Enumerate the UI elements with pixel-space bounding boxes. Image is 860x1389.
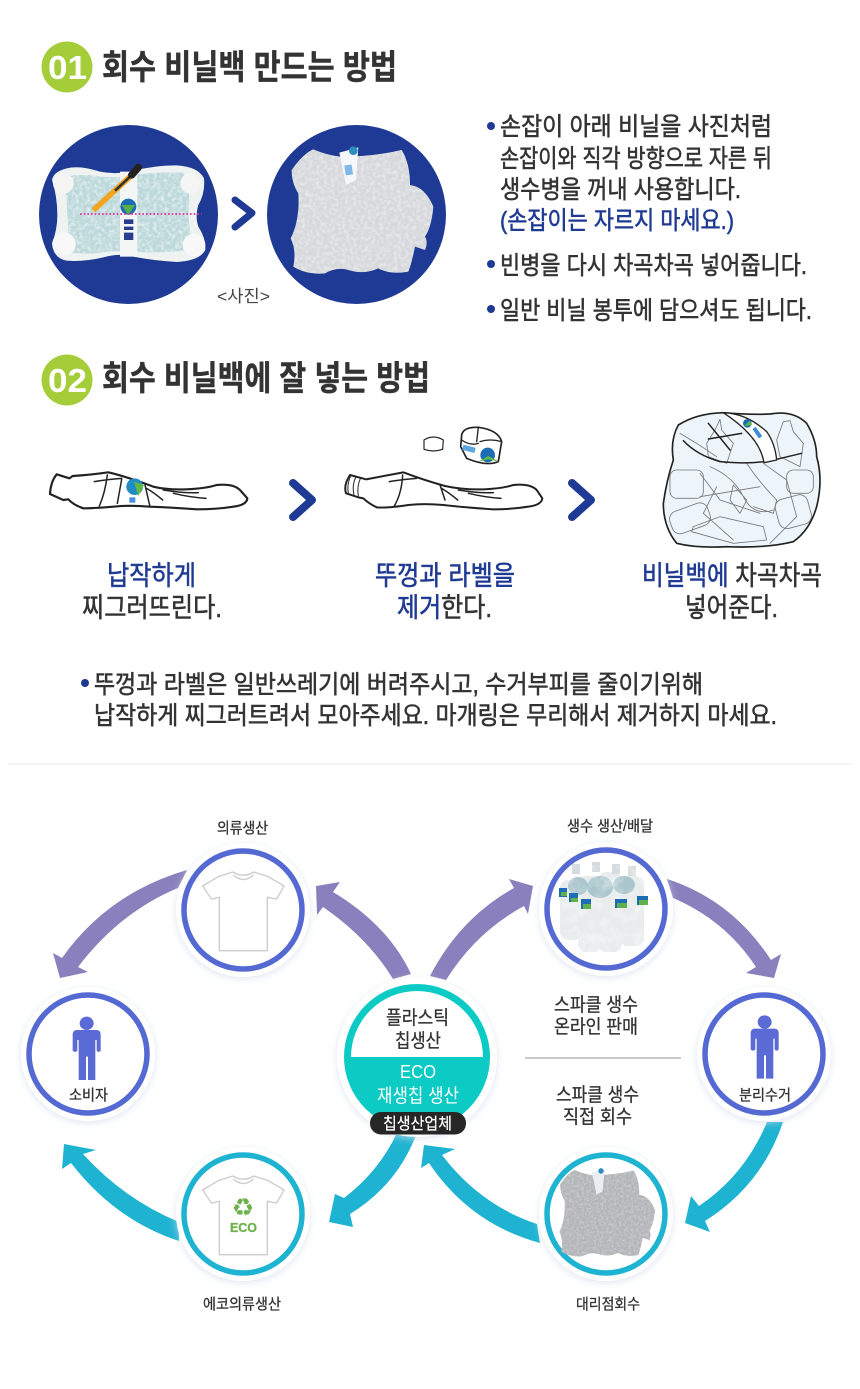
arrow: chip maker to eco clothing <box>329 1135 416 1227</box>
step 2 caption: 제거한다. <box>397 593 492 623</box>
step 1 caption <box>82 561 222 623</box>
icon: t-shirt <box>203 872 284 951</box>
bullet item 1: (손잡이는 자르지 마세요.) <box>500 207 734 235</box>
arrow: step 2 to 3 <box>572 483 591 517</box>
node: clothing production: 의류생산 <box>217 820 268 837</box>
bullet item 2: 빈병을 다시 차곡차곡 넣어줍니다. <box>500 252 807 280</box>
center node: plastic chip production: ECO <box>400 1062 436 1082</box>
center node: plastic chip production: 칩생산 <box>395 1030 441 1052</box>
center-right text: online sale: 스파클 생수 <box>554 994 638 1016</box>
photo: collected bag <box>559 1168 655 1256</box>
node: water production <box>539 818 673 976</box>
center node: plastic chip production: 재생칩 생산 <box>377 1085 459 1107</box>
badge 02 <box>42 354 92 406</box>
icon: person <box>73 1017 101 1080</box>
bottle logo <box>126 478 144 503</box>
step 1 caption: 납작하게 <box>107 561 196 591</box>
cutter <box>93 167 138 210</box>
pill: chip maker <box>370 1112 466 1134</box>
top black cut lines <box>683 423 802 463</box>
bullet item 1 <box>487 113 772 235</box>
title 01: 회수 비닐백 만드는 방법 <box>102 49 397 87</box>
node: consumer: 소비자 <box>69 1087 108 1104</box>
step 3 caption: 비닐백에 차곡차곡 <box>642 561 822 591</box>
node: dealer collection: 대리점회수 <box>576 1296 640 1313</box>
section 02 heading <box>42 354 430 406</box>
node: eco clothing production: 에코의류생산 <box>203 1296 281 1313</box>
step 3 caption: 넣어준다. <box>685 593 778 623</box>
center node: plastic chip production: 플라스틱 <box>386 1007 449 1029</box>
brand logo <box>120 199 136 240</box>
icon: eco t-shirt <box>203 1176 284 1255</box>
photo: water bottles <box>559 862 652 957</box>
badge 01 <box>42 42 92 92</box>
arrow: water to sorting <box>667 879 781 978</box>
node: sorting collection: 분리수거 <box>739 1087 791 1104</box>
arrow: step 1 to 2 <box>293 483 312 517</box>
removed label <box>461 427 502 464</box>
caption: photo: <사진> <box>217 287 270 306</box>
photo: emptied bag <box>267 125 446 304</box>
center-right text: direct collection <box>556 1084 639 1128</box>
node: consumer <box>21 987 155 1121</box>
cut line <box>80 211 202 216</box>
bag label <box>339 146 358 185</box>
cycle arrows: purple <box>53 870 781 980</box>
step 1: crushed bottle <box>50 472 247 509</box>
arrow: clothing to consumer <box>53 870 187 978</box>
instructions list <box>487 113 812 325</box>
arrow: chip maker to clothing <box>316 882 411 979</box>
arrow: eco clothing to consumer <box>62 1144 179 1241</box>
badge 01: 01 <box>48 49 87 86</box>
step 3: bag full of bottles <box>663 413 820 547</box>
photo: bottle pack with cutter <box>39 125 218 304</box>
node: eco clothing production <box>176 1147 310 1313</box>
title 02: 회수 비닐백에 잘 넣는 방법 <box>102 360 430 398</box>
node: dealer collection <box>539 1147 673 1313</box>
bullet item 3: 일반 비닐 봉투에 담으셔도 됩니다. <box>500 297 812 325</box>
cycle arrows: teal <box>62 1122 783 1243</box>
label band <box>723 413 777 463</box>
center-right text: online sale: 온라인 판매 <box>554 1016 638 1038</box>
step 2: bottle, cap and label <box>345 427 542 509</box>
center-right text: direct collection: 스파클 생수 <box>556 1084 639 1106</box>
bottle without label <box>345 472 542 509</box>
note on caps and labels: 뚜껑과 라벨은 일반쓰레기에 버려주시고, 수거부피를 줄이기위해 <box>94 671 703 699</box>
section 01 heading <box>42 42 397 92</box>
arrow: sorting to dealer <box>685 1122 783 1232</box>
node: water production: 생수 생산/배달 <box>567 818 653 835</box>
center node: plastic chip production <box>337 977 497 1137</box>
label strip <box>120 172 137 257</box>
bullet item 1: 손잡이와 직각 방향으로 자른 뒤 <box>500 145 772 173</box>
arrow: photo step <box>235 200 252 227</box>
icon: eco t-shirt: ♻ <box>232 1193 254 1222</box>
bullet item 1: 손잡이 아래 비닐을 사진처럼 <box>500 113 772 141</box>
arrow: dealer to chip maker <box>421 1145 540 1243</box>
node: sorting collection <box>697 987 831 1121</box>
note on caps and labels: 납작하게 찌그러트려서 모아주세요. 마개링은 무리해서 제거하지 마세요. <box>94 702 777 730</box>
crushed bottles <box>667 419 813 543</box>
step 1 caption: 찌그러뜨린다. <box>82 593 222 623</box>
arrow: chip maker to water <box>430 879 533 980</box>
step 2 caption: 뚜껑과 라벨을 <box>375 561 515 591</box>
step 3 caption <box>642 561 822 623</box>
center-right text: direct collection: 직접 회수 <box>563 1106 632 1128</box>
note on caps and labels <box>81 671 777 730</box>
badge 02: 02 <box>48 362 87 399</box>
icon: person <box>751 1015 779 1079</box>
center-right text: online sale <box>554 994 638 1038</box>
cap <box>424 437 443 451</box>
step 2 caption <box>375 561 515 623</box>
bullet item 1: 생수병을 꺼내 사용합니다. <box>500 176 741 204</box>
node: clothing production <box>176 820 310 977</box>
icon: eco t-shirt: ECO <box>230 1220 257 1235</box>
pill: chip maker: 칩생산업체 <box>383 1115 452 1133</box>
